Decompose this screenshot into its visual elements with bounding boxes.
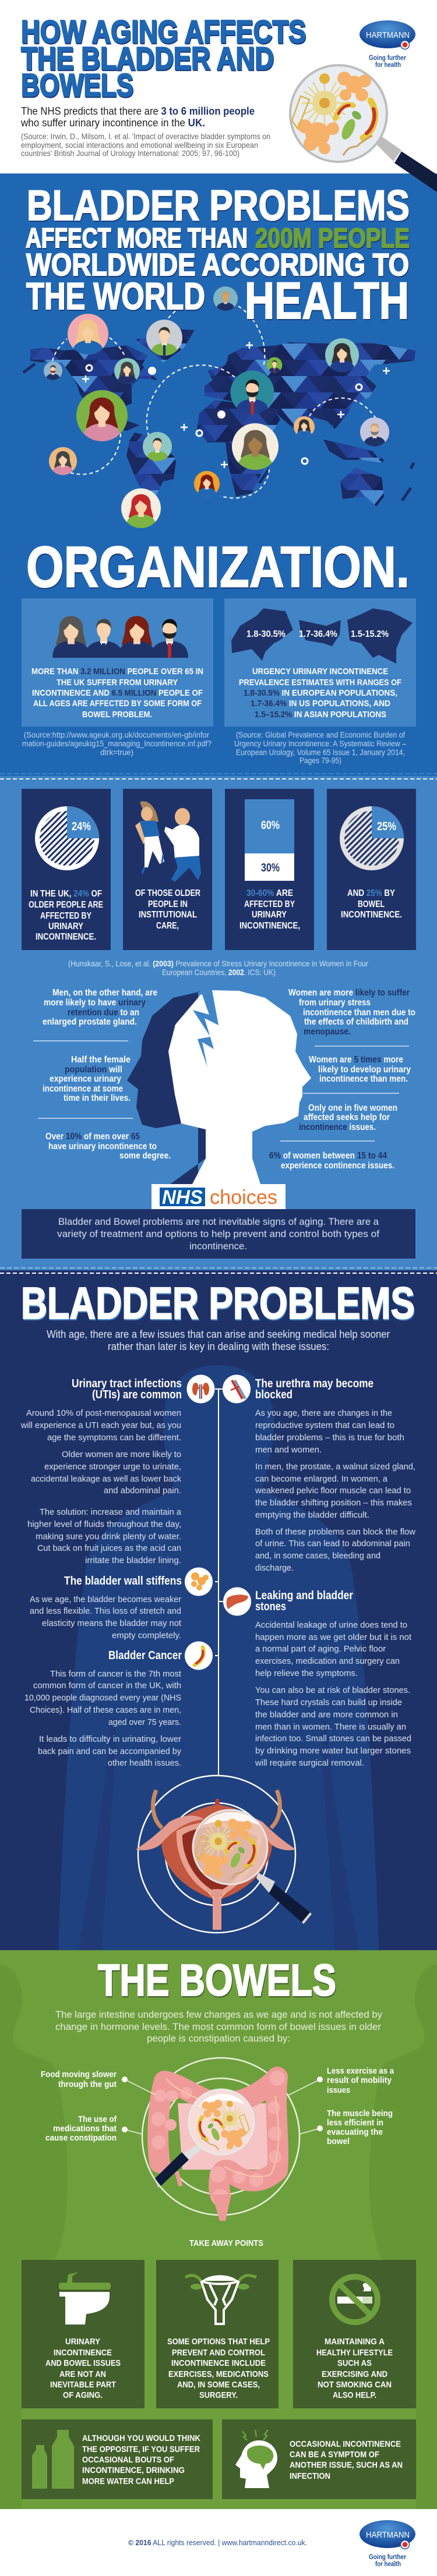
- card text: OLDER PEOPLE ARE: [29, 900, 103, 910]
- Hartmann logo: for health: [375, 61, 401, 69]
- panel text: PREVALENCE ESTIMATES WITH RANGES OF: [239, 678, 401, 688]
- callouts: evacuating the: [327, 2127, 383, 2137]
- card: 30-60 percent: [225, 789, 314, 950]
- column: left issues: [20, 1377, 182, 1768]
- icon: bacillus: [185, 1642, 213, 1670]
- facts about women: experience continence issues.: [281, 1161, 394, 1171]
- card text: 30-60% ARE: [246, 888, 293, 898]
- card text: OCCASIONAL INCONTINENCE: [290, 2439, 401, 2449]
- card text: INCONTINENCE.: [341, 910, 402, 920]
- facts about men: more likely to have urinary: [44, 998, 146, 1008]
- facts about men: Over 10% of men over 65: [45, 1132, 140, 1142]
- item: bladder wall: As we age, the bladder becomes weaker: [30, 1595, 181, 1604]
- item: urinary tract infections: experience stronger urge to urinate,: [44, 1462, 181, 1472]
- facts about men: Half the female: [71, 1055, 131, 1065]
- panel text: 1.7-36.4% IN US POPULATIONS, AND: [251, 699, 390, 708]
- copyright: © 2016 ALL rights reserved. | www.hartmanndirect.co.uk.: [128, 2538, 307, 2547]
- headline: THE WORLD: [26, 275, 205, 317]
- item: urinary tract infections: Cut back on fruit juices as the acid can: [37, 1543, 181, 1553]
- section: the bowels (green): [0, 1950, 437, 2509]
- item: leaking and stones: exercises, medication and surgery can: [255, 1656, 400, 1666]
- icon: continents with percentages: 1.7-36.4%: [299, 629, 337, 639]
- facts about men: enlarged prostate gland.: [43, 1017, 137, 1027]
- icon: reproductive system: [185, 2275, 256, 2324]
- facts about men: incontinence at some: [43, 1084, 123, 1094]
- item: leaking and stones: These hard crystals can build up inside: [255, 1698, 402, 1707]
- item: leaking and stones: a normal part of aging. Pelvic floor: [255, 1644, 386, 1654]
- callouts: The muscle being: [327, 2109, 393, 2118]
- panel text: MORE THAN 3.2 MILLION PEOPLE OVER 65 IN: [31, 667, 203, 676]
- panel text: URGENCY URINARY INCONTINENCE: [252, 667, 388, 676]
- magnifying glass over intro: [290, 65, 437, 192]
- card text: [45, 2337, 121, 2400]
- intro text: who suffer urinary incontinence in the UK.: [20, 117, 205, 129]
- item: urinary tract infections: irritate the bladder lining.: [85, 1555, 181, 1565]
- item: leaking and stones: [255, 1589, 412, 1768]
- item: bladder cancer: aged over 75 years.: [108, 1717, 181, 1727]
- card text: ALTHOUGH YOU WOULD THINK: [82, 2433, 200, 2443]
- Hartmann logo: Going further: [369, 2553, 406, 2561]
- source notes: mation-guides/ageukig15_managing_Incontinence.inf.pdf?: [22, 739, 212, 748]
- item: urinary tract infections: making sure you drink plenty of water.: [36, 1532, 181, 1542]
- card text: AND 25% BY: [347, 888, 395, 898]
- item: bladder cancer: other health issues.: [108, 1758, 181, 1768]
- facts about men: population will: [65, 1065, 122, 1075]
- Hartmann logo: [360, 20, 415, 69]
- card text: ANOTHER ISSUE, SUCH AS AN: [290, 2460, 403, 2470]
- source notes: [22, 731, 406, 765]
- heading: THE BOWELS: [98, 1955, 336, 2005]
- item: leaking and stones: infection too. Small stones can be passed: [255, 1734, 411, 1744]
- callouts: [41, 2066, 394, 2146]
- avatars of people around the world: [44, 286, 389, 528]
- source notes: dtrk=true): [100, 748, 133, 757]
- bar chart: [245, 799, 294, 881]
- item: blocked urethra: emptying the bladder difficult.: [255, 1510, 369, 1520]
- Hartmann logo: [360, 2520, 415, 2568]
- card text: MAINTAINING A: [325, 2337, 385, 2347]
- facts about men: have urinary incontinence to: [48, 1142, 157, 1151]
- item: blocked urethra: Both of these problems can block the flow: [255, 1527, 415, 1537]
- item: urinary tract infections: and abdominal pain.: [104, 1486, 181, 1496]
- callouts: result of mobility: [327, 2075, 392, 2085]
- intro text: With age, there are a few issues that can arise and seeking medical help sooner: [47, 1328, 390, 1340]
- facts about men: Men, on the other hand, are: [52, 988, 157, 998]
- icon: continents with percentages: [231, 608, 413, 664]
- panel text: [239, 667, 401, 720]
- item: urinary tract infections: will experience a UTI each year but, as you: [20, 1420, 181, 1430]
- callouts: Food moving slower: [41, 2070, 117, 2079]
- section: intro (white): [0, 0, 437, 173]
- Hartmann logo: Going further: [369, 54, 406, 62]
- facts about women: from urinary stress: [299, 998, 371, 1008]
- card text: INCONTINENCE,: [239, 921, 300, 931]
- item: leaking and stones: the bladder and are more common in: [255, 1710, 398, 1720]
- card text: INCONTINENCE INCLUDE: [171, 2358, 266, 2368]
- facts about women: incontinence than men.: [319, 1074, 408, 1084]
- pie chart 24%: 24%: [72, 820, 91, 833]
- world map: [23, 328, 415, 506]
- item: blocked urethra: men and women.: [255, 1445, 322, 1455]
- panel: global prevalence: [224, 598, 416, 727]
- panel text: ALL AGES ARE AFFECTED BY SOME FORM OF: [33, 699, 202, 708]
- card text: ALSO HELP.: [333, 2390, 376, 2400]
- section: UK figures and head (light blue): [0, 774, 437, 1270]
- take away heading: TAKE AWAY POINTS: [189, 2238, 263, 2248]
- card text: URINARY: [65, 2337, 100, 2347]
- callouts: through the gut: [58, 2079, 117, 2089]
- card text: THE OPPOSITE, IF YOU SUFFER: [82, 2444, 200, 2454]
- card text: SOME OPTIONS THAT HELP: [167, 2337, 270, 2347]
- card text: NOT SMOKING CAN: [318, 2380, 392, 2390]
- facts about women: affected seeks help for: [304, 1112, 390, 1122]
- card text: URINARY: [48, 922, 83, 931]
- item: urinary tract infections: [20, 1377, 182, 1565]
- intro text: The large intestine undergoes few changes as we age and is not affected by: [55, 2009, 382, 2020]
- map markers: [82, 342, 390, 468]
- card text: PEOPLE IN: [148, 899, 188, 909]
- source notes: (Source:http://www.ageuk.org.uk/documents/en-gb/infor: [24, 731, 209, 739]
- facts about women: menopause.: [304, 1027, 351, 1037]
- card text: [167, 2337, 270, 2400]
- lightning crack: [193, 990, 218, 1067]
- section: footer: [0, 2509, 437, 2576]
- source notes: Urgency Urinary Incontinence: A Systematic Review –: [234, 739, 406, 748]
- card: symptom of another issue: [222, 2419, 416, 2499]
- item: blocked urethra: As you age, there are changes in the: [255, 1408, 392, 1418]
- item: blocked urethra: [255, 1377, 415, 1573]
- callouts: bowel: [327, 2136, 350, 2146]
- facts about women: incontinence than men due to: [303, 1008, 415, 1018]
- source notes: Pages 79-95): [299, 756, 341, 765]
- card text: EXERCISES, MEDICATIONS: [168, 2369, 269, 2379]
- dashed connectors: [52, 306, 376, 498]
- intro text: rather than later is key in dealing with these issues:: [108, 1341, 329, 1352]
- icon: four people: [52, 616, 188, 658]
- item: blocked urethra: can become enlarged. In women, a: [255, 1474, 388, 1484]
- item: blocked urethra: the bladder shifting position – this makes: [255, 1498, 412, 1508]
- card text: OF THOSE OLDER: [135, 888, 200, 898]
- message box: variety of treatment and options to help prevent and control both types of: [57, 1228, 379, 1239]
- icon: no smoking: [332, 2277, 378, 2322]
- source note: European Countries, 2002. ICS: UK): [162, 968, 276, 977]
- background body silhouette: [0, 1965, 437, 2509]
- item: blocked urethra: reproductive system that can lead to: [255, 1420, 394, 1430]
- card text: AFFECTED BY: [244, 899, 295, 909]
- item: bladder cancer: Choices). Half of these cases are in men,: [30, 1705, 181, 1715]
- Hartmann logo: HARTMANN: [366, 2530, 410, 2540]
- panel text: 1.5–15.2% IN ASIAN POPULATIONS: [255, 710, 386, 720]
- facts about women: 6% of women between 15 to 44: [269, 1151, 387, 1161]
- facts about men: [43, 988, 171, 1161]
- item: urinary tract infections: Older women are more likely to: [62, 1450, 181, 1459]
- main title: [21, 13, 306, 103]
- item: bladder wall: elasticity means the bladder may not: [42, 1618, 182, 1628]
- card text: MORE WATER CAN HELP: [82, 2476, 174, 2486]
- card text: INEVITABLE PART: [50, 2380, 116, 2390]
- message box: incontinence.: [189, 1241, 247, 1252]
- message box: Bladder and Bowel problems are not inevitable signs of aging. There are a: [58, 1216, 379, 1227]
- icon: continents with percentages: 1.8-30.5%: [246, 629, 286, 639]
- card text: INCONTINENCE: [54, 2348, 112, 2358]
- column: right issues: [255, 1377, 415, 1768]
- source note: [21, 132, 270, 158]
- icon: blocked urethra: [223, 1375, 251, 1403]
- pie chart 25%: 25%: [377, 820, 396, 833]
- main title: THE BLADDER AND: [21, 40, 274, 76]
- panel text: INCONTINENCE AND 6.5 MILLION PEOPLE OF: [32, 688, 203, 698]
- source note: [68, 959, 368, 977]
- item: bladder cancer: Bladder Cancer: [108, 1649, 182, 1662]
- item: bladder wall: [30, 1575, 182, 1640]
- intro text: people is constipation caused by:: [147, 2033, 290, 2044]
- source note: (Source: Irwin, D., Milsom, I. et al. 'Impact of overactive bladder symptoms on: [21, 132, 270, 141]
- item: blocked urethra: bladder problems – this is true for both: [255, 1433, 404, 1443]
- main title: BOWELS: [21, 67, 133, 103]
- item: urinary tract infections: higher level of fluids throughout the day,: [27, 1519, 181, 1529]
- illustration: colon under magnifier: [142, 2058, 299, 2221]
- card text: URINARY: [252, 910, 287, 920]
- item: blocked urethra: weakened pelvic floor muscle can lead to: [255, 1486, 411, 1496]
- icon: walking couple: [135, 801, 201, 882]
- headline: [26, 182, 410, 599]
- card: treatment options: [156, 2260, 279, 2408]
- intro text: [47, 1328, 390, 1352]
- card: not inevitable: [22, 2260, 145, 2408]
- icon: orange cells: [185, 1567, 213, 1596]
- timeline spine: [215, 1389, 223, 1776]
- icon: continents with percentages: 1.5-15.2%: [351, 629, 389, 639]
- intro text: The NHS predicts that there are 3 to 6 million people: [21, 105, 255, 117]
- panel: UK statistics: [22, 598, 213, 727]
- facts about men: some degree.: [119, 1151, 171, 1161]
- message box: [22, 1209, 415, 1259]
- pie chart 25%: [340, 806, 404, 870]
- item: leaking and stones: Leaking and bladder: [255, 1589, 353, 1602]
- intro text: [55, 2009, 382, 2044]
- item: urinary tract infections: (UTIs) are common: [92, 1388, 182, 1401]
- source note: (Hunskaar, S., Lose, et al. (2003) Prevalence of Stress Urinary Incontinence in Women in Four: [68, 959, 368, 968]
- card text: BOWEL: [358, 899, 385, 909]
- card text: ARE NOT AN: [59, 2369, 106, 2379]
- facts about women: [269, 988, 415, 1171]
- icon: kidneys: [186, 1375, 214, 1403]
- facts about men: retention due to an: [68, 1008, 139, 1018]
- card text: [290, 2439, 403, 2481]
- callouts: Less exercise as a: [327, 2066, 394, 2076]
- card text: [82, 2433, 200, 2486]
- card text: HEALTHY LIFESTYLE: [316, 2348, 393, 2358]
- section: bladder problems (navy): [0, 1268, 437, 1950]
- item: blocked urethra: and, in some cases, bleeding and: [255, 1551, 380, 1561]
- callouts: less efficient in: [327, 2118, 383, 2128]
- item: leaking and stones: Accidental leakage of urine does tend to: [255, 1620, 407, 1630]
- item: leaking and stones: You can also be at risk of bladder stones.: [255, 1685, 410, 1695]
- item: leaking and stones: happen more as we get older but it is not: [255, 1632, 412, 1642]
- NHS choices logo: [151, 1184, 286, 1210]
- card text: [29, 889, 103, 942]
- item: bladder wall: and less flexible. This loss of stretch and: [30, 1606, 181, 1616]
- card text: OCCASIONAL BOUTS OF: [82, 2455, 174, 2465]
- headline: AFFECT MORE THAN: [26, 222, 248, 253]
- item: blocked urethra: of urine. This can lead to abdominal pain: [255, 1539, 410, 1549]
- card text: SUCH AS: [337, 2358, 372, 2368]
- item: urinary tract infections: Urinary tract infections: [72, 1377, 182, 1390]
- source notes: (Source: Global Prevalence and Economic Burden of: [236, 731, 405, 739]
- card text: [316, 2337, 393, 2400]
- icon: water bottles: [32, 2430, 74, 2489]
- intro text: [20, 105, 255, 129]
- item: bladder cancer: It leads to difficulty in urinating, lower: [39, 1734, 181, 1744]
- illustration: bladder under magnifier: [136, 1776, 312, 1933]
- item: bladder cancer: back pain and can be accompanied by: [38, 1746, 181, 1756]
- callouts: medications that: [53, 2124, 117, 2134]
- Hartmann logo: for health: [375, 2560, 401, 2568]
- item: bladder cancer: 10,000 people diagnosed every year (NHS: [24, 1693, 181, 1703]
- facts about women: the effects of childbirth and: [304, 1017, 408, 1027]
- icon: liver: [223, 1587, 251, 1616]
- card: 25 percent: [327, 789, 416, 950]
- card text: EXERCISING AND: [322, 2369, 387, 2379]
- icon: toilet: [59, 2272, 111, 2325]
- main title: HOW AGING AFFECTS: [21, 13, 306, 49]
- bar chart: 60%: [261, 819, 280, 832]
- section: world statistics (blue): [0, 173, 437, 776]
- card: drinking water: [22, 2419, 213, 2499]
- item: blocked urethra: discharge.: [255, 1563, 294, 1573]
- panel text: THE UK SUFFER FROM URINARY: [57, 678, 178, 688]
- source note: employment, social interactions and emotional wellbeing in six European: [21, 141, 258, 150]
- item: urinary tract infections: accidental leakage as well as lower back: [31, 1474, 181, 1484]
- card text: PREVENT AND CONTROL: [172, 2348, 265, 2358]
- card text: OF AGING.: [63, 2390, 103, 2400]
- item: bladder cancer: This form of cancer is the 7th most: [50, 1669, 182, 1679]
- icon: head with brain: [235, 2430, 277, 2488]
- panel text: BOWEL PROBLEM.: [82, 710, 152, 720]
- facts about women: incontinence issues.: [299, 1122, 376, 1132]
- panel text: 1.8-30.5% IN EUROPEAN POPULATIONS,: [244, 688, 397, 698]
- item: blocked urethra: blocked: [255, 1388, 292, 1401]
- card text: [135, 888, 200, 931]
- card: healthy lifestyle: [293, 2260, 416, 2408]
- item: leaking and stones: by drinking more water but larger stones: [255, 1746, 411, 1756]
- item: urinary tract infections: Around 10% of post-menopausal women: [26, 1408, 181, 1418]
- pie chart 24%: [35, 806, 99, 870]
- card text: SURGERY.: [199, 2390, 238, 2400]
- callout leaders: [122, 2077, 323, 2134]
- intro text: change in hormone levels. The most common form of bowel issues in older: [55, 2021, 381, 2032]
- illustration: two head silhouettes: [127, 990, 311, 1184]
- card text: INCONTINENCE, DRINKING: [82, 2465, 185, 2475]
- card: 24 percent: [22, 789, 111, 950]
- item: bladder wall: empty completely.: [112, 1631, 181, 1640]
- item: leaking and stones: help relieve the symptoms.: [255, 1668, 358, 1678]
- item: urinary tract infections: age the symptoms can be different.: [47, 1433, 181, 1443]
- card text: AFFECTED BY: [40, 911, 91, 921]
- bar chart: 30%: [261, 862, 280, 874]
- callouts: The use of: [78, 2114, 117, 2124]
- card text: AND BOWEL ISSUES: [45, 2358, 121, 2368]
- panel text: [31, 667, 203, 720]
- card text: INSTITUTIONAL: [139, 910, 197, 920]
- item: leaking and stones: will require surgical removal.: [255, 1758, 364, 1768]
- card text: CARE,: [156, 921, 179, 931]
- facts about men: experience urinary: [50, 1074, 121, 1084]
- item: leaking and stones: men than in women. There is usually an: [255, 1722, 406, 1732]
- item: blocked urethra: In men, the prostate, a walnut sized gland,: [255, 1462, 415, 1472]
- facts about women: likely to develop urinary: [318, 1065, 411, 1075]
- item: urinary tract infections: The solution: increase and maintain a: [40, 1507, 182, 1517]
- card text: IN THE UK, 24% OF: [30, 889, 102, 899]
- card text: CAN BE A SYMPTOM OF: [290, 2450, 379, 2460]
- facts about men: time in their lives.: [64, 1093, 131, 1103]
- item: bladder wall: The bladder wall stiffens: [64, 1575, 182, 1588]
- background body silhouette: [58, 1365, 379, 1950]
- facts about women: Only one in five women: [308, 1103, 397, 1113]
- item: bladder cancer: common form of cancer in the UK, with: [33, 1681, 181, 1691]
- NHS choices logo: NHS: [162, 1186, 203, 1209]
- item: bladder cancer: [24, 1649, 182, 1768]
- card text: AND, IN SOME CASES,: [177, 2380, 260, 2390]
- card text: INCONTINENCE.: [36, 932, 96, 942]
- item: leaking and stones: stones: [255, 1600, 286, 1613]
- card text: [239, 888, 300, 931]
- callouts: issues: [327, 2085, 350, 2095]
- item: blocked urethra: The urethra may become: [255, 1377, 373, 1390]
- source notes: European Urology, Volume 65 Issue 1, January 2014,: [236, 748, 405, 757]
- NHS choices logo: choices: [210, 1186, 277, 1209]
- card: institutional care: [123, 789, 212, 950]
- facts about women: Women are 5 times more: [309, 1055, 403, 1065]
- source note: countries' British Journal of Urology International: 2005; 97, 96-100): [21, 149, 239, 158]
- facts about women: Women are more likely to suffer: [288, 988, 410, 998]
- Hartmann logo: HARTMANN: [366, 30, 410, 40]
- headline: 200M PEOPLE: [255, 222, 410, 253]
- card text: INFECTION: [290, 2471, 330, 2481]
- callouts: cause constipation: [45, 2133, 117, 2143]
- card text: [341, 888, 402, 920]
